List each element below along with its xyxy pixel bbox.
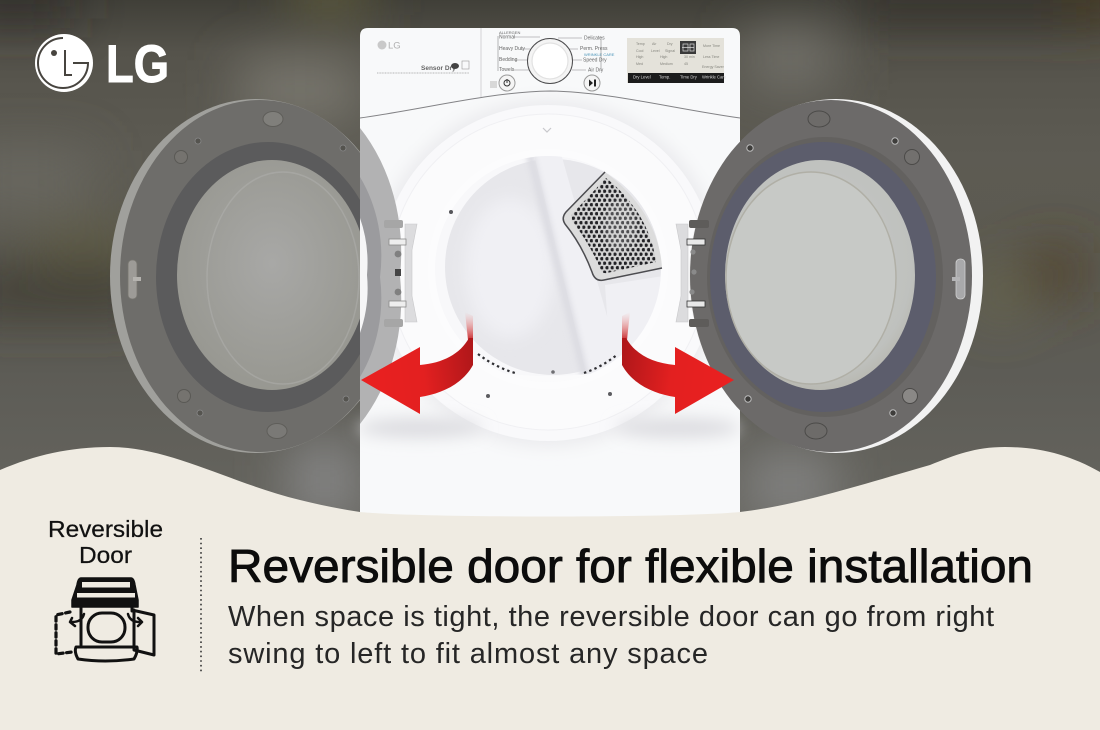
display panel: High	[636, 55, 643, 59]
top panel curve line	[360, 91, 740, 118]
display panel	[627, 38, 727, 83]
cycle labels right: WRINKLE CARE	[584, 52, 615, 57]
cycle labels left: Bedding	[499, 57, 518, 63]
right door hinge	[676, 220, 709, 327]
lint slots	[478, 354, 515, 373]
left red arrow	[361, 312, 473, 414]
door latch chevron	[543, 128, 551, 132]
right door (opaque, new hinge side)	[676, 99, 983, 453]
cycle dial	[528, 38, 572, 84]
cycle labels left	[498, 30, 540, 73]
Sensor Dry badge: Sensor Dry	[421, 65, 456, 72]
icon label	[48, 516, 163, 568]
display panel: Air	[652, 42, 657, 46]
Sensor Dry badge	[377, 61, 469, 73]
shadows beneath arrows	[358, 418, 482, 438]
display panel: High	[660, 55, 667, 59]
description: When space is tight, the reversible door can go from right	[228, 601, 994, 633]
power button	[490, 75, 515, 91]
display panel: Temp	[636, 42, 645, 46]
display panel: 30 min	[684, 55, 695, 59]
display panel: Dry	[667, 42, 673, 46]
heading: Reversible door for flexible installation	[228, 540, 1033, 592]
icon label: Door	[79, 542, 132, 568]
display panel: Signal	[665, 49, 675, 53]
start button	[584, 75, 600, 91]
icon label: Reversible	[48, 516, 163, 542]
display panel: Level	[651, 49, 660, 53]
display panel: Time Dry	[680, 74, 698, 80]
dotted divider	[200, 538, 202, 672]
display panel: Med	[636, 62, 643, 66]
display panel: Medium	[660, 62, 673, 66]
cycle labels right	[558, 36, 615, 74]
display panel: Cool	[636, 49, 644, 53]
door surround recess	[374, 99, 722, 447]
display panel: Dry Level	[633, 74, 651, 80]
lint filter vent	[563, 172, 662, 280]
display panel: Less Time	[703, 55, 719, 59]
cycle labels left: Normal	[499, 34, 515, 40]
dryer cabinet	[358, 28, 740, 530]
LG logo	[35, 34, 169, 94]
left door hardware	[128, 112, 349, 438]
left door hinge	[384, 220, 417, 327]
display panel: More Time	[703, 44, 720, 48]
cream wave panel	[0, 447, 1100, 730]
drum opening	[445, 156, 661, 375]
description: swing to left to fit almost any space	[228, 638, 708, 670]
cycle labels left: ALLERGEN	[499, 30, 520, 35]
right door hardware	[745, 111, 965, 439]
cycle labels right: Delicates	[584, 36, 605, 42]
display panel: Wrinkle Care	[702, 74, 727, 80]
LG badge	[378, 40, 401, 52]
cycle labels right: Air Dry	[588, 68, 604, 74]
cycle labels left: Towels	[499, 67, 515, 73]
display panel: Temp.	[659, 74, 670, 80]
cycle labels right: Perm. Press	[580, 46, 608, 52]
description	[228, 601, 994, 670]
cycle labels right: Speed Dry	[583, 58, 607, 64]
LG badge: LG	[388, 40, 401, 52]
icon: dryer with reversible door	[56, 578, 154, 661]
blurred room background	[0, 0, 1100, 520]
control panel	[377, 28, 727, 97]
display panel: Energy Saver	[702, 65, 725, 69]
cycle labels left: Heavy Duty	[499, 46, 525, 52]
screws	[486, 394, 490, 398]
LG logo: LG	[106, 35, 169, 94]
display panel: 45	[684, 62, 688, 66]
right red arrow	[622, 312, 734, 414]
left door (faded, original hinge side)	[110, 99, 417, 453]
